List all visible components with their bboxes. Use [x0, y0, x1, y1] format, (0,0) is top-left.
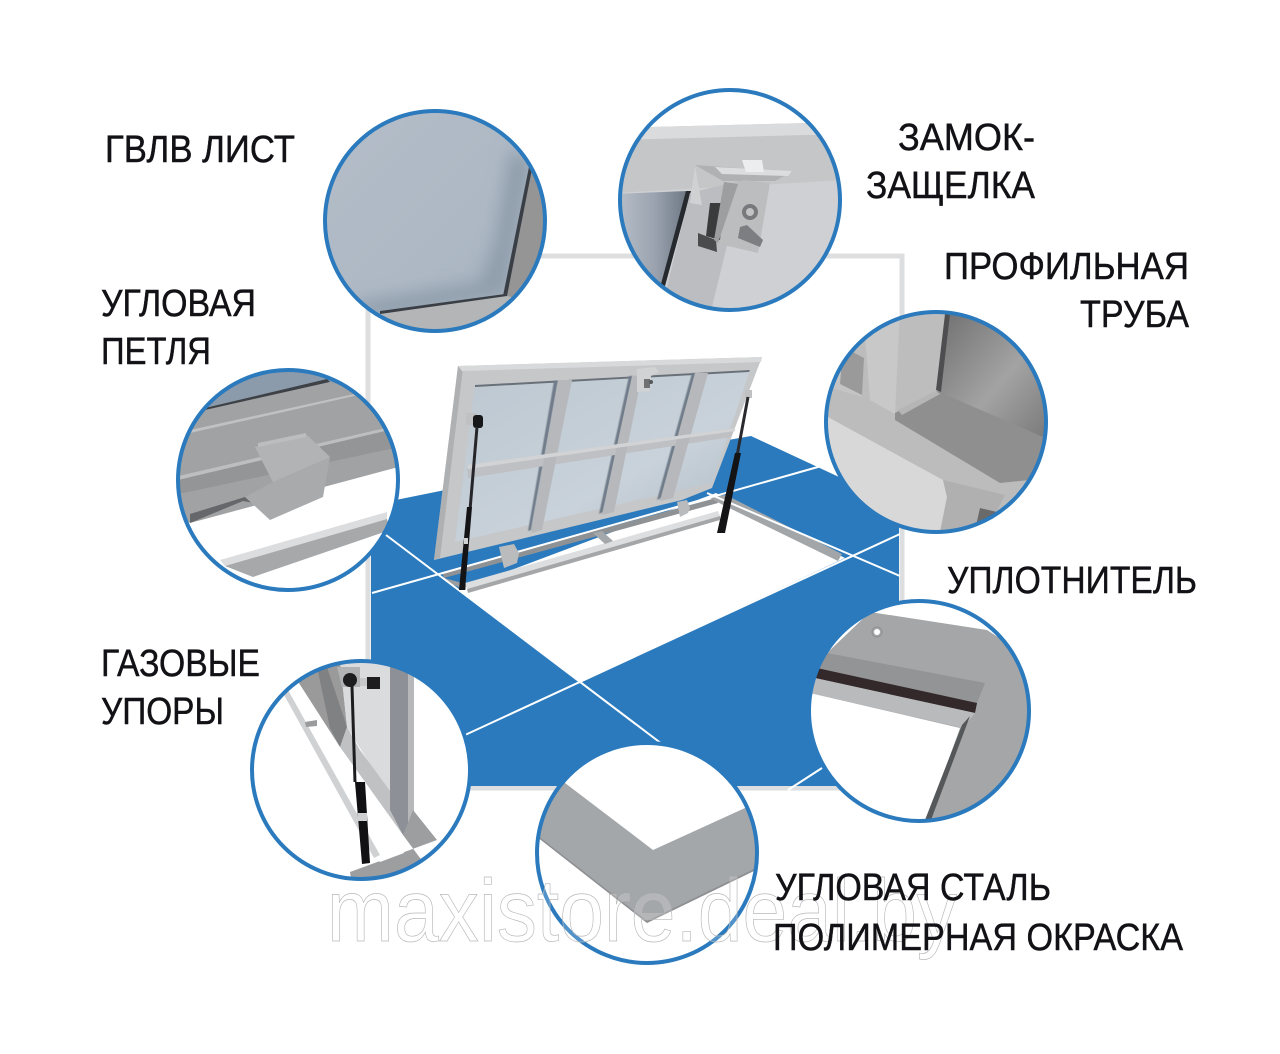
label: lock: ЗАЩЕЛКА [866, 165, 1036, 207]
label: angle steel: УГЛОВАЯ СТАЛЬ [775, 867, 1051, 909]
callout circle: lock [615, 85, 845, 315]
label: hinge [101, 283, 256, 373]
label: gas struts: ГАЗОВЫЕ [101, 643, 260, 685]
callout circle: profile pipe [820, 308, 1052, 538]
callout circle: seal [805, 597, 1033, 825]
label: lock [866, 117, 1036, 207]
callout circle: angle steel [532, 740, 762, 968]
label: lock: ЗАМОК- [898, 117, 1035, 159]
label: seal: УПЛОТНИТЕЛЬ [947, 560, 1197, 602]
callout circle: sheet [320, 105, 552, 340]
gas strut left [459, 413, 483, 590]
label: profile pipe: ПРОФИЛЬНАЯ [944, 246, 1189, 288]
label: hinge: ПЕТЛЯ [101, 331, 211, 373]
gas strut right [717, 390, 752, 533]
label: profile pipe [944, 246, 1190, 336]
label: angle steel [773, 867, 1184, 959]
open lid [434, 357, 762, 560]
label: gas struts [101, 643, 260, 733]
label: angle steel: ПОЛИМЕРНАЯ ОКРАСКА [773, 917, 1184, 959]
frame outline [368, 256, 902, 788]
frame hinges [499, 500, 690, 568]
callout circle: hinge [174, 367, 402, 593]
label: hinge: УГЛОВАЯ [101, 283, 256, 325]
white guide lines [372, 463, 900, 790]
callout circle: gas strut [248, 655, 474, 885]
label: sheet: ГВЛВ ЛИСТ [105, 129, 295, 171]
label: gas struts: УПОРЫ [101, 691, 224, 733]
label: profile pipe: ТРУБА [1080, 294, 1190, 336]
blue floor with opening [371, 436, 899, 786]
hatch frame rails [442, 495, 842, 593]
watermark: maxistore.deal.by [327, 861, 957, 960]
